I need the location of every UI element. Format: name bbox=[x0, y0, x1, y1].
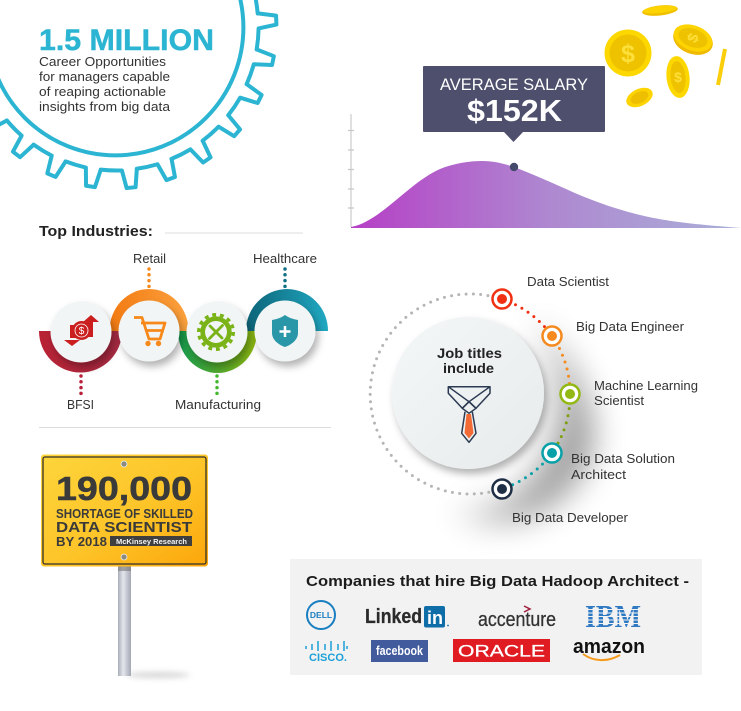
labels: job titles: Big Data Solution bbox=[571, 451, 675, 466]
labels: job titles: Big Data Developer bbox=[512, 510, 629, 525]
icon: healthcare shield bbox=[254, 300, 316, 362]
icon: BFSI money exchange: $ bbox=[79, 326, 85, 337]
text: career opportunities description bbox=[39, 54, 171, 114]
connector dots: retail bbox=[147, 269, 151, 287]
text: career opportunities description: insights from big data bbox=[39, 99, 171, 114]
panel: average salary bbox=[348, 4, 741, 228]
logo: Dell bbox=[307, 601, 335, 629]
sign board bbox=[41, 454, 208, 566]
icon: gear outline bbox=[0, 0, 278, 190]
labels: job titles: Architect bbox=[571, 467, 626, 482]
soft shadow behind job disc bbox=[450, 320, 594, 521]
logo: Facebook: facebook bbox=[376, 643, 424, 658]
labels: job titles bbox=[512, 274, 698, 525]
heading: companies that hire: Companies that hire Big Data Hadoop Architect - bbox=[306, 573, 689, 590]
chart: linked half rings bbox=[39, 289, 328, 373]
heading: top industries: Top Industries: bbox=[39, 223, 153, 240]
heading: job titles include bbox=[437, 345, 502, 376]
panel: shortage road sign bbox=[41, 454, 208, 678]
node: big data developer bbox=[492, 480, 512, 498]
labels: job titles: Machine Learning bbox=[594, 378, 698, 393]
heading: 1.5 million: 1.5 MILLION bbox=[39, 24, 214, 57]
job disc bbox=[392, 317, 544, 469]
text: career opportunities description: for managers capable bbox=[39, 69, 170, 84]
logo: Cisco bbox=[306, 641, 347, 664]
logo: Accenture: accenture bbox=[478, 609, 556, 631]
connector dots: manufacturing bbox=[215, 376, 219, 394]
chart: salary distribution curve bbox=[348, 114, 741, 228]
icon: BFSI money exchange bbox=[50, 302, 112, 362]
logo: Facebook bbox=[371, 640, 428, 662]
icon: falling gold coins: $ bbox=[684, 30, 703, 46]
logo: Cisco: CISCO. bbox=[309, 652, 347, 664]
labels: job titles: Big Data Engineer bbox=[576, 319, 685, 334]
sign board: McKinsey Research bbox=[116, 537, 187, 546]
callout: average salary: AVERAGE SALARY bbox=[440, 75, 588, 94]
callout: average salary: $152K bbox=[467, 93, 563, 128]
logo: IBM: IBM bbox=[585, 598, 641, 634]
labels: industries: Healthcare bbox=[253, 251, 317, 266]
node: data scientist bbox=[492, 290, 512, 308]
panel: job titles bbox=[370, 274, 698, 525]
logo: Oracle: ORACLE bbox=[458, 642, 545, 660]
logo: Dell: DELL bbox=[310, 610, 332, 620]
icon: retail shopping cart bbox=[118, 300, 180, 362]
panel: career opportunities bbox=[0, 0, 278, 190]
callout: average salary bbox=[423, 66, 605, 142]
sign board: SHORTAGE OF SKILLED bbox=[56, 506, 193, 521]
node: machine learning scientist bbox=[560, 384, 580, 404]
heading: job titles include: include bbox=[443, 360, 494, 376]
icon: falling gold coins: $ bbox=[674, 69, 682, 85]
labels: job titles: Data Scientist bbox=[527, 274, 609, 289]
connector dots: healthcare bbox=[283, 269, 287, 287]
panel: hiring companies bbox=[290, 559, 702, 675]
heading: job titles include: Job titles bbox=[437, 345, 502, 361]
labels: industries: Retail bbox=[133, 251, 166, 266]
node: big data engineer bbox=[542, 326, 562, 346]
connector dots: BFSI bbox=[79, 376, 83, 394]
node: big data solution architect bbox=[542, 444, 562, 462]
logo: Oracle bbox=[453, 639, 550, 662]
logo: Amazon: amazon bbox=[573, 636, 645, 658]
text: career opportunities description: Career Opportunities bbox=[39, 54, 167, 69]
labels: job titles: Scientist bbox=[594, 393, 644, 408]
logo: LinkedIn: in bbox=[427, 608, 443, 628]
chart: dotted orbit bbox=[370, 294, 570, 494]
icon: falling gold coins bbox=[604, 4, 725, 111]
labels: industries: BFSI bbox=[67, 397, 94, 412]
icon: manufacturing gear and tools bbox=[186, 302, 248, 362]
icon: falling gold coins: $ bbox=[621, 40, 635, 68]
panel: top industries bbox=[39, 223, 331, 428]
sign pole bbox=[118, 566, 190, 678]
logo: LinkedIn: Linked bbox=[365, 606, 422, 628]
sign board: BY 2018 bbox=[56, 534, 107, 549]
labels: industries: Manufacturing bbox=[175, 397, 261, 412]
icon: collar and tie bbox=[448, 387, 490, 442]
sign board: 190,000 bbox=[56, 470, 192, 507]
text: career opportunities description: of reaping actionable bbox=[39, 84, 166, 99]
labels: industries bbox=[67, 251, 317, 412]
sign board: DATA SCIENTIST bbox=[56, 519, 192, 536]
